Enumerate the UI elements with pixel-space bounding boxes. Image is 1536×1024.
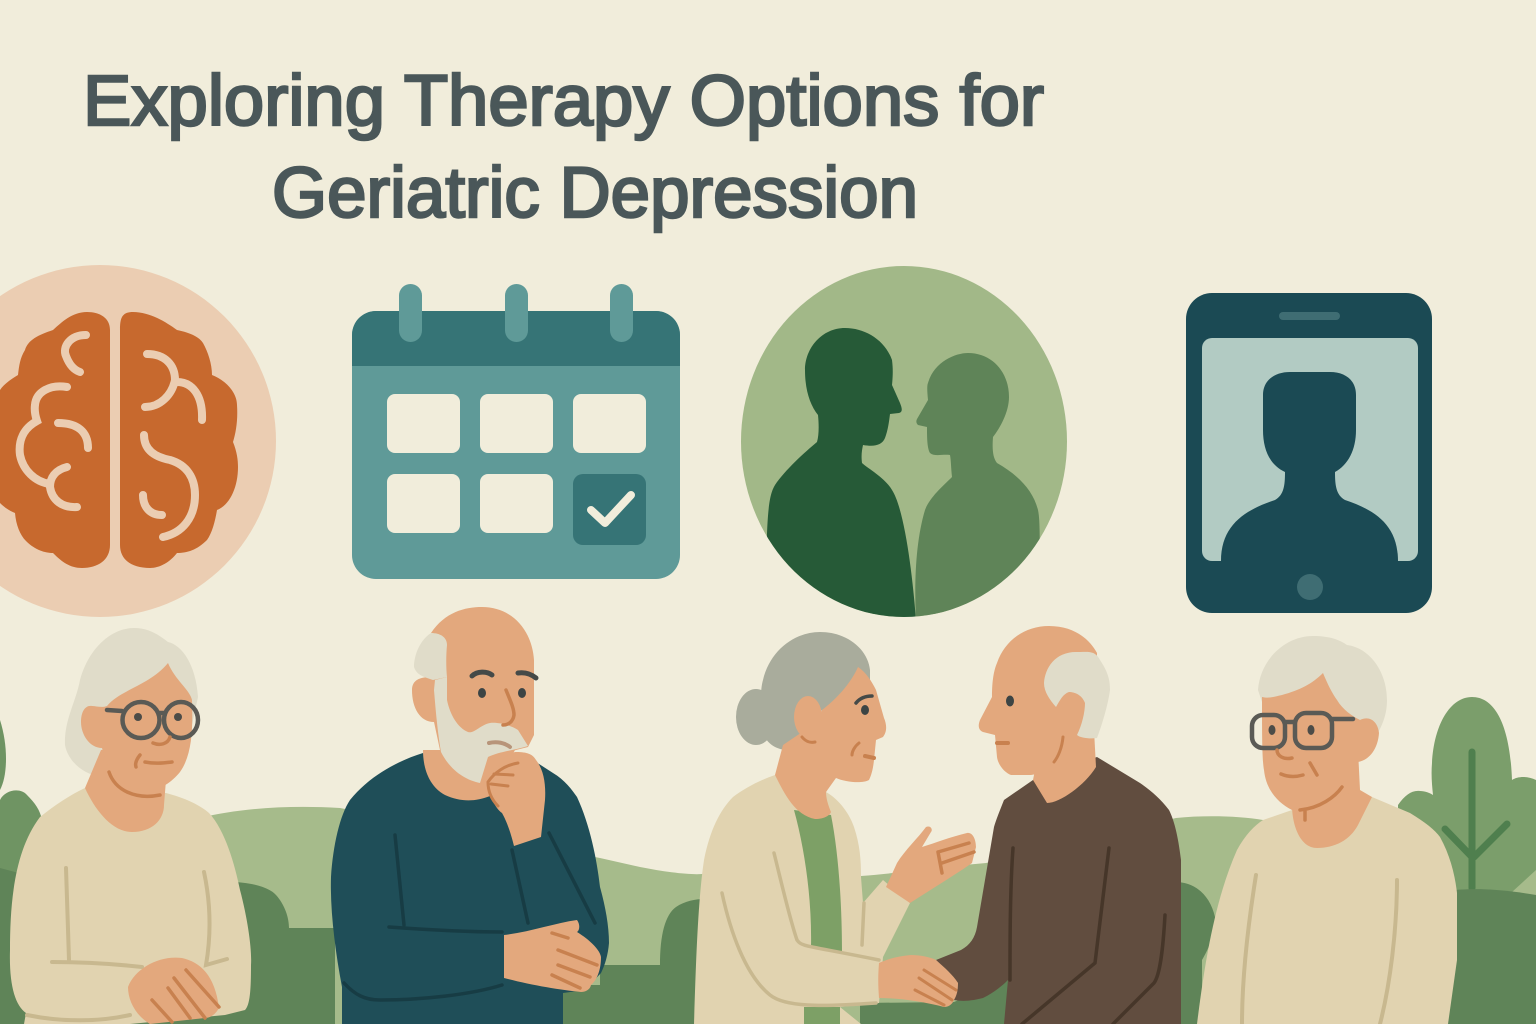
title [83, 62, 1044, 233]
person: thoughtful bald man [331, 607, 609, 1024]
person: woman with glasses, left [10, 628, 251, 1024]
person: bald man in brown sweater [936, 626, 1181, 1024]
landscape background [0, 697, 1536, 1024]
person: woman talking [694, 632, 976, 1024]
icon: brain [0, 265, 276, 617]
person: woman with glasses, right [1197, 636, 1457, 1024]
title: Exploring Therapy Options for [83, 62, 1044, 141]
icon: calendar [352, 284, 680, 579]
icon: two people in conversation [741, 266, 1067, 620]
handshake [878, 955, 958, 1007]
icon: tablet with video call [1186, 293, 1432, 613]
title: Geriatric Depression [272, 154, 918, 233]
